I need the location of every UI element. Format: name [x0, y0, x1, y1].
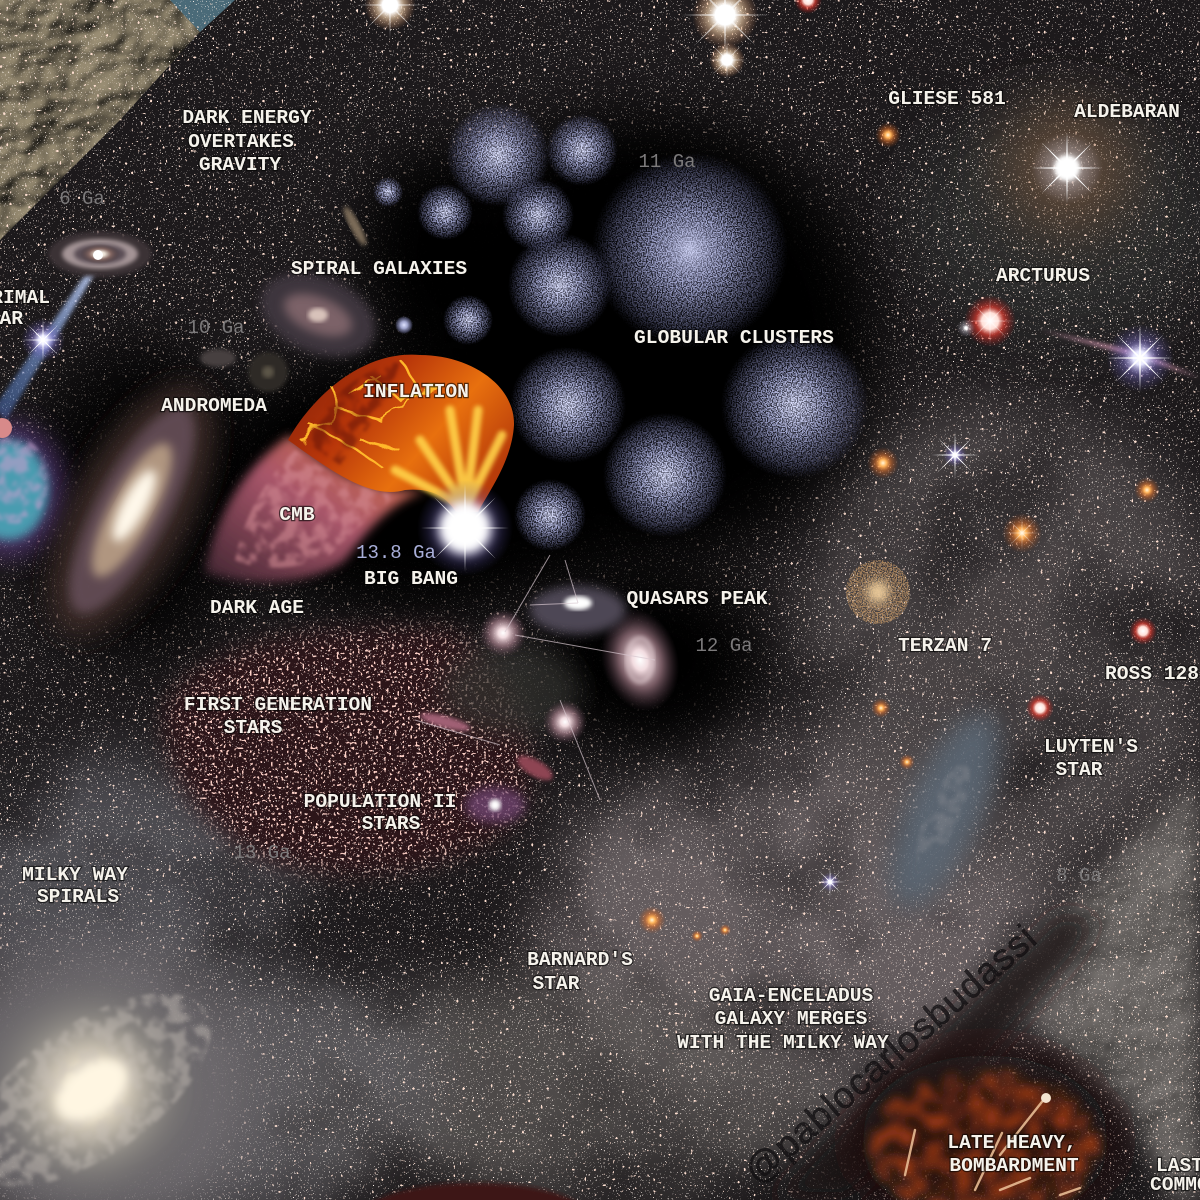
label: Arcturus: ARCTURUS [996, 265, 1090, 287]
time marker: 13 Ga: 13 Ga [233, 842, 291, 864]
star: Aldebaran [1005, 106, 1129, 230]
label: spiral galaxies: SPIRAL GALAXIES [291, 258, 467, 280]
galaxy: spiral galaxies group [200, 204, 388, 392]
globular clusters [373, 103, 869, 551]
label: Ross 128: ROSS 128 [1105, 663, 1199, 685]
nebula: primal supernova remnant [0, 418, 64, 558]
label: dark age: DARK AGE [210, 597, 304, 619]
terrain: blue ocean sliver at top [170, 0, 235, 32]
label: primal star [0, 287, 50, 330]
label: dark energy: GRAVITY [199, 154, 281, 176]
label: Milky Way spirals: MILKY WAY [22, 864, 128, 886]
label: last common ancestor [1150, 1155, 1200, 1196]
galaxy: Andromeda [15, 359, 249, 661]
CMB region [205, 435, 428, 582]
label: Barnard's star [527, 949, 633, 995]
label: globular clusters: GLOBULAR CLUSTERS [634, 327, 834, 349]
label: Barnard's star: BARNARD'S [527, 949, 633, 971]
label: Milky Way spirals: SPIRALS [37, 886, 119, 908]
star: Arcturus [964, 295, 1016, 347]
label: dark energy: DARK ENERGY [182, 107, 312, 129]
galaxy: 6 Ga spiral with beam to primal star [0, 231, 152, 420]
galaxy: Milky Way spiral [0, 922, 260, 1200]
label: Gaia-Enceladus merger: GAIA-ENCELADUS [709, 985, 874, 1007]
late heavy bombardment lava [860, 1055, 1110, 1200]
bright stars on the right [638, 319, 1200, 942]
cluster: Terzan 7 [846, 560, 910, 624]
label: inflation: INFLATION [363, 381, 469, 403]
star: primal star [21, 318, 65, 362]
dark void behind clusters [25, 115, 875, 750]
time marker: 10 Ga: 10 Ga [187, 317, 245, 339]
label: late heavy bombardment: LATE HEAVY, [947, 1132, 1077, 1154]
label: Gaia-Enceladus merger: GALAXY MERGES [715, 1008, 868, 1030]
label: Luyten's star: STAR [1055, 759, 1103, 781]
terrain: mountains in top-left corner [0, 0, 202, 240]
label: Gaia-Enceladus merger [677, 985, 889, 1054]
label: late heavy bombardment [947, 1132, 1079, 1177]
label: Milky Way spirals [22, 864, 128, 908]
label: Luyten's star: LUYTEN'S [1044, 736, 1138, 758]
first generation and Population II stars [146, 608, 549, 892]
label: quasars peak: QUASARS PEAK [626, 588, 768, 610]
star: Gliese 581 [875, 122, 901, 148]
label: Population II stars: STARS [362, 813, 421, 835]
label: Barnard's star: STAR [532, 973, 580, 995]
label: Big Bang: BIG BANG [364, 568, 458, 590]
label: Population II stars [304, 791, 456, 835]
watermark: @pablocarlosbudassi [736, 917, 1044, 1192]
label: Andromeda: ANDROMEDA [161, 395, 267, 417]
label: Luyten's star [1044, 736, 1138, 781]
label: Gaia-Enceladus merger: WITH THE MILKY WAY [677, 1032, 889, 1054]
time marker: 6 Ga: 6 Ga [59, 188, 105, 210]
label: Terzan 7: TERZAN 7 [898, 635, 992, 657]
label: Aldebaran: ALDEBARAN [1074, 101, 1180, 123]
label: Population II stars: POPULATION II [304, 791, 456, 813]
inflation fireball [288, 355, 514, 512]
label: 13.8 Ga: 13.8 Ga [356, 542, 436, 564]
big bang star [417, 480, 513, 576]
label: first generation stars [184, 694, 372, 739]
rock: grey Earth surface at bottom-right [1020, 770, 1200, 1200]
label: late heavy bombardment: BOMBARDMENT [949, 1155, 1079, 1177]
stars at the top edge [356, 0, 822, 82]
quasar galaxies [415, 555, 690, 823]
dark band between space and Earth [770, 910, 1100, 1200]
time marker: 8 Ga: 8 Ga [1056, 865, 1102, 887]
label: dark energy: OVERTAKES [188, 131, 294, 153]
label: dark energy [182, 107, 312, 176]
label: first generation stars: STARS [224, 717, 283, 739]
label: first generation stars: FIRST GENERATION [184, 694, 372, 716]
planet: dark red limb at bottom edge [365, 1183, 585, 1200]
galaxy arm: blue-grey Milky Way band [869, 699, 1021, 921]
label: CMB: CMB [279, 504, 315, 526]
time marker: 12 Ga: 12 Ga [695, 635, 753, 657]
label: Gliese 581: GLIESE 581 [888, 88, 1006, 110]
time marker: 11 Ga: 11 Ga [638, 151, 696, 173]
